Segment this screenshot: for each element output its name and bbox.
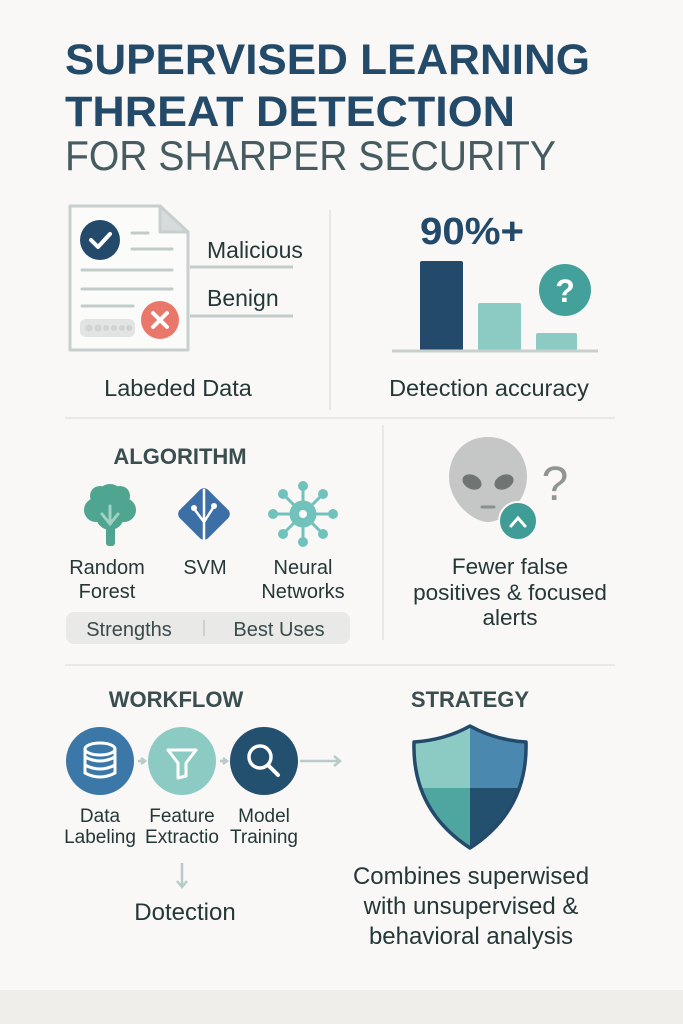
text: fewer false positives: positives & focused [413,580,607,605]
text: detection: Dotection [134,899,236,926]
labels: workflow steps: Training [230,827,298,848]
labels: workflow steps: Model [238,806,290,827]
pill: strengths / best uses: Strengths [86,619,172,641]
panel: strategy [353,687,589,950]
title: SUPERVISED LEARNING [65,36,590,84]
title: FOR SHARPER SECURITY [65,132,556,179]
title: THREAT DETECTION [65,88,515,136]
caption: detection accuracy: Detection accuracy [389,375,589,401]
caption: labeled data: Labeded Data [104,375,253,401]
text: strategy: with unsupervised & [363,893,578,920]
labels: workflow steps: Labeling [64,827,136,848]
labels: workflow steps: Extractio [145,827,219,848]
heading: strategy: STRATEGY [411,687,529,712]
panel: labeled data: Benign [207,285,279,311]
heading: workflow: WORKFLOW [109,687,243,712]
icon: up badge [499,502,537,540]
icon: question mark: ? [542,458,568,511]
labels: algorithms: Neural [274,557,332,579]
step: model training [230,727,298,795]
panel: fewer false positives [413,437,607,630]
text: strategy: Combines superwised [353,863,589,890]
icon: tree [84,484,136,546]
icon: question: ? [555,273,575,309]
icon: document [70,206,188,350]
panel: detection accuracy [389,211,598,401]
text: strategy [353,863,589,950]
bar chart [392,261,598,351]
title [65,36,590,179]
pill: strengths / best uses: Best Uses [233,619,325,641]
panel: labeled data: Malicious [207,237,303,263]
icon: svm diamond [176,486,232,542]
text: fewer false positives: alerts [482,605,538,630]
stat: 90%+: 90%+ [420,211,524,253]
panel: workflow [64,687,340,926]
icon: neural network [268,481,338,547]
text: fewer false positives [413,554,607,630]
labels: workflow steps [64,806,298,848]
pill: strengths / best uses [66,612,350,644]
labels: workflow steps: Data [80,806,120,827]
step: feature extraction [148,727,216,795]
panel: algorithm [66,444,350,644]
icon: shield [410,720,530,852]
icon: alien [449,437,527,522]
labels: algorithms: Forest [79,581,136,603]
labels: algorithms: Random [69,557,145,579]
labels: algorithms: Networks [261,581,345,603]
panel: labeled data [70,206,303,401]
arrows [138,756,340,887]
text: fewer false positives: Fewer false [452,554,568,579]
labels: algorithms [69,557,345,603]
step: data labeling [66,727,134,795]
text: strategy: behavioral analysis [369,923,573,950]
labels: workflow steps: Feature [149,806,215,827]
icon: question [539,264,591,316]
heading: algorithm: ALGORITHM [113,444,247,469]
labels: algorithms: SVM [183,557,227,579]
